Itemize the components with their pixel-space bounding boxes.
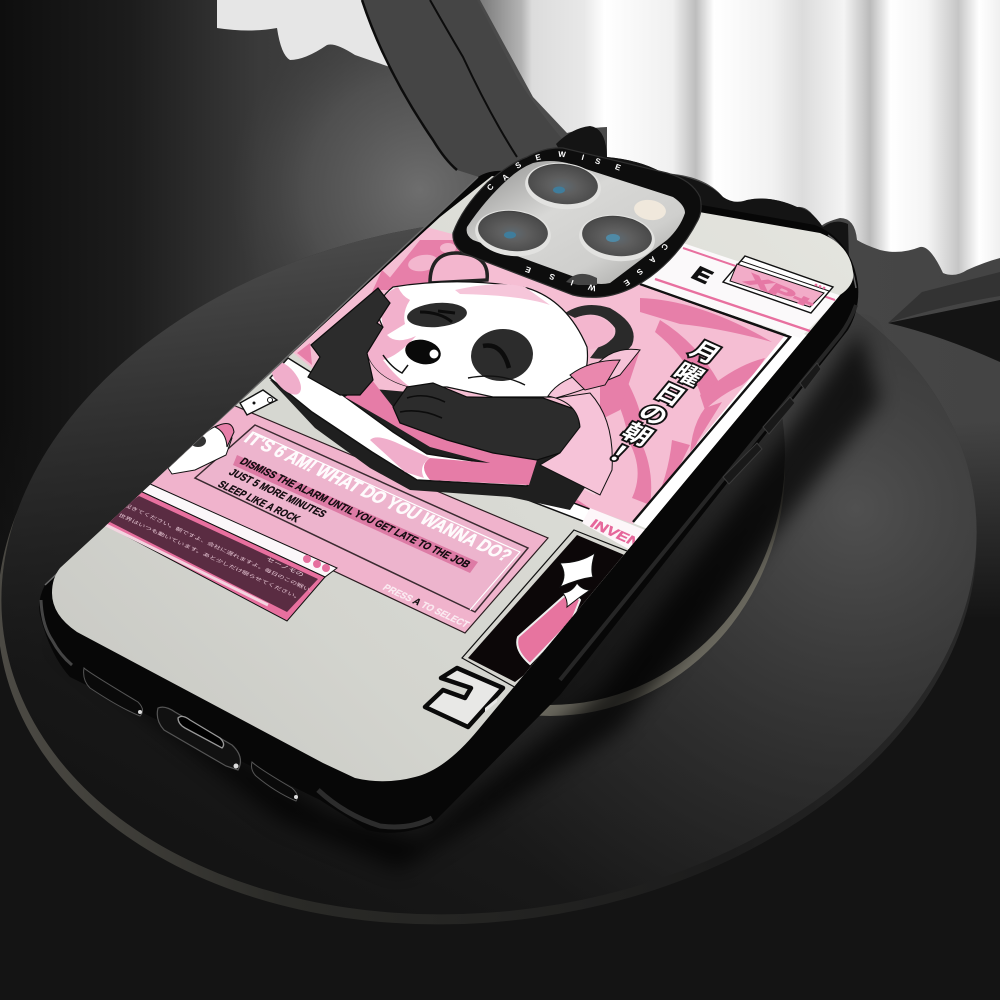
screen printed artwork <box>52 176 854 782</box>
panel: top band with letter E: E <box>687 263 717 288</box>
phone shadow <box>50 330 880 870</box>
eye wrinkle <box>468 376 525 385</box>
brand ring text: I <box>581 153 585 162</box>
japanese title: 朝 <box>616 419 657 451</box>
ear right <box>565 305 634 359</box>
brand ring text: A <box>500 172 511 183</box>
dialog inner box <box>195 425 528 612</box>
raised arm <box>308 288 390 395</box>
panel: XP+ badge: XP+ <box>741 271 819 313</box>
flash <box>633 198 667 222</box>
microphone <box>566 274 597 285</box>
curtain right <box>480 0 1000 275</box>
lower arm <box>393 383 580 460</box>
panel: grey base <box>52 176 854 782</box>
icon: small star <box>563 583 590 607</box>
pink pillow shading <box>345 380 537 485</box>
icon: large star <box>560 553 595 587</box>
brand ring text: E <box>614 162 622 173</box>
brand ring text: S <box>514 160 523 171</box>
option text: SLEEP LIKE A ROCK <box>215 479 303 525</box>
lens left <box>473 206 553 260</box>
black shadow under blanket <box>270 380 590 510</box>
panel: INVEN tab: INVEN <box>587 517 644 550</box>
icon: big numeral 2 <box>425 668 503 727</box>
small round platform <box>315 205 785 716</box>
brand ring text: I <box>570 278 575 287</box>
option text: DISMISS THE ALARM UNTIL YOU GET LATE TO THE JOB <box>237 456 473 570</box>
brand ring text: W <box>558 150 567 159</box>
japanese title: 月 <box>684 337 725 369</box>
ear left <box>430 253 487 283</box>
icon: small character peek <box>168 423 234 474</box>
japanese title <box>597 337 725 470</box>
panel: XP+ badge <box>723 256 833 313</box>
eye left <box>407 302 467 328</box>
japanese title: 日 <box>649 379 690 411</box>
panel: pink dialog <box>143 405 548 633</box>
white pillow strip <box>270 358 534 486</box>
camera glass <box>467 161 685 284</box>
brand ring text: S <box>634 266 645 277</box>
icon: speech tag <box>240 390 277 415</box>
lens top <box>523 159 603 213</box>
phone case body <box>39 171 858 833</box>
panel: white art frame <box>527 284 807 528</box>
panel: dark caption box <box>100 483 337 621</box>
blanket over shoulder <box>540 349 640 495</box>
panel: pink art background <box>290 220 790 524</box>
dialog title: IT'S 6 AM! WHAT DO YOU WANNA DO? <box>240 429 516 565</box>
dark wavy base behind phone <box>556 126 850 300</box>
japanese caption: 起きてください。朝ですよ、会社に遅れますよ。毎日のこの戦い。 <box>123 502 318 596</box>
panel: black inventory card <box>461 529 628 688</box>
press A prompt: PRESS A TO SELECT <box>380 583 471 630</box>
curtain left <box>217 0 390 67</box>
brand ring text: E <box>621 277 631 288</box>
camera island <box>453 148 701 297</box>
brand ring text: S <box>548 271 556 282</box>
side buttons <box>723 363 821 484</box>
mouth <box>383 355 408 373</box>
brand ring text: W <box>587 282 597 293</box>
brand ring text: A <box>647 254 658 265</box>
lens right <box>577 211 657 265</box>
panel: top band with letter E <box>640 243 842 338</box>
head <box>367 282 588 397</box>
highlighted row <box>233 455 478 573</box>
japanese caption: セーノモの <box>265 556 305 578</box>
brand ring text: C <box>659 242 670 252</box>
eye right <box>471 329 533 381</box>
arched stand <box>362 0 580 190</box>
brand ring text <box>485 150 670 293</box>
brand ring text: E <box>524 264 532 275</box>
brand ring text: E <box>534 152 543 163</box>
nose <box>405 340 441 364</box>
head pink shading <box>367 287 416 387</box>
japanese title: 曜 <box>667 359 708 391</box>
option text: JUST 5 MORE MINUTES <box>226 467 329 520</box>
japanese title: の <box>632 399 673 431</box>
brand ring text: C <box>485 182 496 193</box>
illustration: panda <box>265 253 640 510</box>
japanese caption: 世界はいつも動いています。あと少しだけ眠らせてください。 <box>117 512 303 601</box>
japanese title: ！ <box>597 438 638 470</box>
right block <box>888 272 1000 362</box>
bottom ports <box>84 668 298 801</box>
brand ring text: S <box>594 156 602 167</box>
